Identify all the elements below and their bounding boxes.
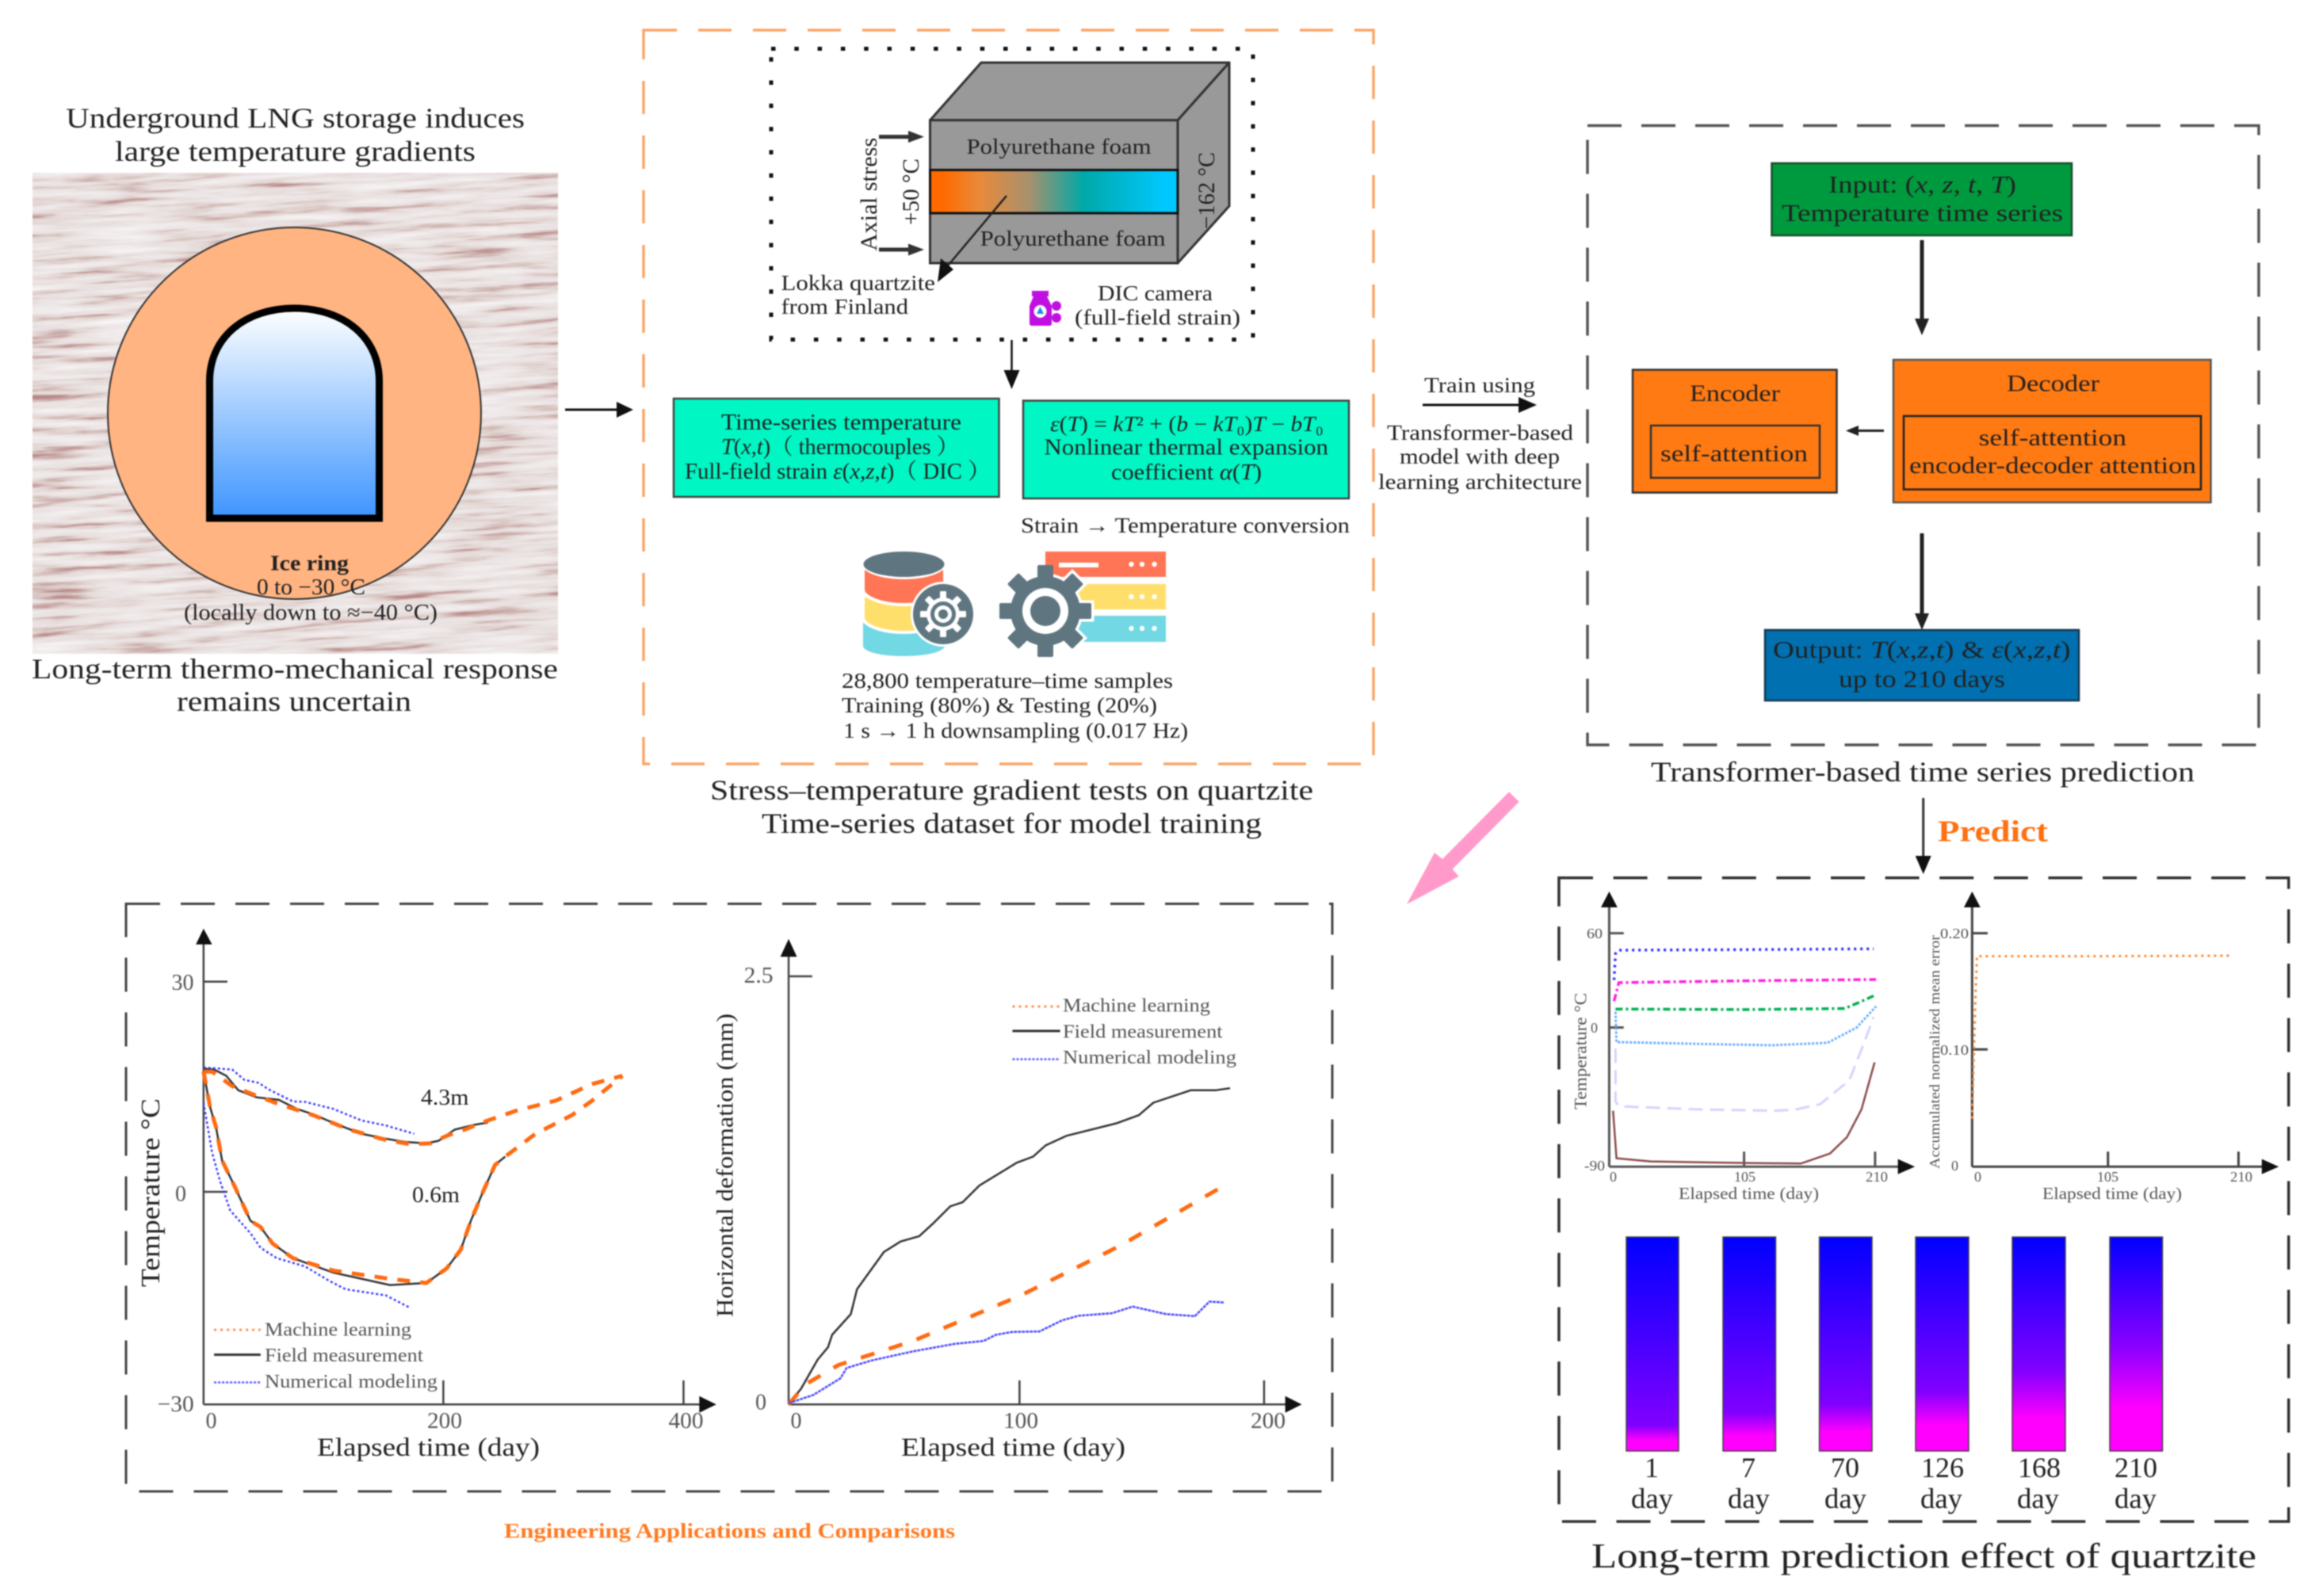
panel: long-term prediction (black dashed) <box>1559 878 2289 1522</box>
chart labels: Field measurement <box>265 1346 423 1366</box>
axes <box>1964 892 2279 1174</box>
icon: database with gear <box>862 549 976 656</box>
text: Lokka quartzite: Lokka quartzite <box>781 271 935 295</box>
axial stress and hot side labels: +50 °C <box>898 158 924 225</box>
panel: transformer model (gray dashed) <box>1587 125 2259 745</box>
chart labels: 0 <box>791 1409 802 1434</box>
gradient bars: 168 day: 168 <box>2018 1452 2061 1483</box>
chart labels: Elapsed time (day) <box>901 1434 1125 1462</box>
label: predict: Predict <box>1938 815 2048 849</box>
chart labels: 210 <box>1866 1169 1888 1185</box>
chart labels: Elapsed time (day) <box>2042 1184 2182 1203</box>
rock texture background <box>32 173 559 655</box>
box: time-series temperature data: Full-field strain ε(x,z,t)（ DIC ） <box>685 459 991 484</box>
heading: underground LNG storage: Underground LNG storage induces <box>66 102 525 134</box>
gradient bars: 7 day: 7 <box>1741 1452 1755 1483</box>
panel: stress-temperature tests (orange dashed) <box>644 30 1373 764</box>
axes <box>196 929 716 1413</box>
chart labels: Machine learning <box>265 1319 411 1340</box>
box: encoder <box>1633 370 1837 493</box>
dotted test setup frame <box>771 49 1253 339</box>
chart labels <box>1927 926 2252 1203</box>
series: field measurement <box>789 1088 1230 1404</box>
box: decoder: Decoder <box>2007 371 2099 396</box>
chart labels: 200 <box>1251 1409 1286 1434</box>
series: error curve <box>1972 956 2230 1119</box>
ice ring circle <box>108 227 481 599</box>
chart labels: Field measurement <box>1063 1021 1223 1042</box>
arrow: decoder to encoder <box>1846 426 1884 436</box>
text: long-term response uncertain: remains uncertain <box>177 685 411 717</box>
arrow: decoder to output <box>1915 533 1929 630</box>
text: dataset description: 28,800 temperature–time samples <box>842 669 1173 693</box>
gradient bars: 70 day: day <box>1824 1483 1866 1514</box>
series: numerical modeling <box>204 1067 415 1308</box>
arrow: train using transformer: Transformer-based <box>1387 421 1574 445</box>
chart: accumulated normalized mean error <box>1927 892 2279 1203</box>
chart: horizontal deformation comparison <box>712 939 1302 1462</box>
series: numerical modeling <box>789 1302 1224 1403</box>
legend lines <box>1012 1006 1060 1060</box>
caption: stress-temperature tests <box>710 774 1313 839</box>
gradient bars: 7 day: day <box>1728 1483 1770 1514</box>
box: output <box>1765 630 2079 701</box>
chart labels <box>1571 926 1888 1203</box>
chart labels: 200 <box>427 1409 462 1434</box>
series: machine learning <box>204 1071 622 1283</box>
chart labels: 105 <box>1734 1169 1755 1185</box>
ice ring label: (locally down to ≈−40 °C) <box>184 601 437 625</box>
chart labels: 400 <box>669 1409 704 1434</box>
chart: predicted temperature <box>1571 892 1915 1203</box>
chart labels: 105 <box>2097 1169 2118 1185</box>
heading: underground LNG storage: large temperature gradients <box>115 136 476 167</box>
text: long-term response uncertain <box>32 653 558 717</box>
box: thermal expansion equation: Nonlinear thermal expansion <box>1045 436 1328 460</box>
series: temperature curves <box>1613 949 1876 1163</box>
chart labels: Horizontal deformation (mm) <box>712 1014 739 1317</box>
gradient bars: 70 day: 70 <box>1831 1452 1859 1483</box>
box: thermal expansion equation <box>1023 401 1349 498</box>
chart labels: 60 <box>1587 926 1603 941</box>
chart labels: 0 <box>1610 1169 1617 1185</box>
text: DIC camera: (full-field strain) <box>1075 306 1240 330</box>
gradient bars: 210 day <box>2110 1237 2162 1514</box>
arrow: setup to data boxes <box>1003 340 1019 389</box>
text: Lokka quartzite: from Finland <box>781 295 909 319</box>
caption: engineering applications: Engineering Applications and Comparisons <box>504 1520 955 1543</box>
chart labels: Numerical modeling <box>1063 1048 1236 1068</box>
specimen block: Polyurethane foam <box>980 227 1166 250</box>
chart labels: Elapsed time (day) <box>317 1434 540 1462</box>
icon: DIC camera <box>1030 291 1061 326</box>
axial stress and hot side labels: Axial stress <box>856 138 882 251</box>
chart labels: 0 <box>206 1409 217 1434</box>
box: decoder: self-attention <box>1979 425 2126 451</box>
arrow: train using transformer: Train using <box>1424 373 1535 397</box>
text: strain to temperature conversion: Strain → Temperature conversion <box>1021 514 1351 537</box>
panel: engineering applications (dashed) <box>126 903 1332 1491</box>
text: DIC camera: DIC camera <box>1098 281 1213 305</box>
chart labels <box>136 971 704 1462</box>
chart labels: 30 <box>171 971 193 995</box>
axial stress and hot side labels <box>856 131 924 255</box>
arrow: rock to tests <box>565 402 633 418</box>
chart labels: Numerical modeling <box>265 1372 437 1392</box>
chart labels: Elapsed time (day) <box>1679 1184 1819 1203</box>
box: input: Temperature time series <box>1782 199 2063 227</box>
box: output: up to 210 days <box>1839 665 2005 693</box>
arrow: train using transformer: model with deep <box>1400 445 1560 468</box>
caption: stress-temperature tests: Stress–temperature gradient tests on quartzite <box>710 774 1313 806</box>
box: thermal expansion equation: ε(T) = kT² + (b − kT₀)T − bT₀ <box>1050 412 1324 436</box>
text: dataset description <box>842 669 1188 743</box>
text: DIC camera <box>1075 281 1240 330</box>
chart labels: −30 <box>158 1392 194 1417</box>
arrow: predict <box>1916 798 1931 874</box>
arrow: to quartzite label <box>938 196 1007 282</box>
chart: temperature comparison <box>136 929 716 1462</box>
series: machine learning <box>789 1188 1221 1404</box>
icon: server stack with gear <box>999 552 1166 657</box>
series: field measurement <box>204 1069 505 1285</box>
chart labels: Machine learning <box>1063 995 1210 1016</box>
box: decoder: encoder-decoder attention <box>1909 452 2196 479</box>
arrow: train using transformer: learning architecture <box>1378 470 1582 494</box>
chart labels: 0 <box>755 1390 766 1415</box>
chart labels: 0 <box>1951 1158 1958 1174</box>
box: time-series temperature data: Time-series temperature <box>721 410 961 435</box>
LNG tunnel <box>209 308 379 518</box>
chart labels: 100 <box>1003 1409 1038 1434</box>
box: time-series temperature data: T(x,t)（ thermocouples ） <box>721 434 959 460</box>
heading: underground LNG storage <box>66 102 525 167</box>
caption: stress-temperature tests: Time-series dataset for model training <box>762 808 1262 839</box>
specimen block: Polyurethane foam <box>967 135 1151 158</box>
gradient bars: 126 day: 126 <box>1921 1452 1964 1483</box>
box: decoder <box>1893 360 2211 502</box>
gradient bars: 1 day: 1 <box>1645 1452 1659 1483</box>
caption: transformer-based prediction: Transformer-based time series prediction <box>1651 756 2195 788</box>
legend lines <box>214 1330 261 1383</box>
arrow: train using transformer <box>1378 373 1582 494</box>
gradient bars: 126 day: day <box>1920 1483 1962 1514</box>
gradient bars: 126 day <box>1916 1237 1969 1514</box>
box: input <box>1772 163 2072 235</box>
gradient bars: 1 day: day <box>1631 1483 1673 1514</box>
text: dataset description: Training (80%) & Testing (20%) <box>842 693 1157 717</box>
chart labels: 0.20 <box>1940 926 1969 941</box>
ice ring label: 0 to −30 °C <box>257 575 365 600</box>
box: encoder: Encoder <box>1690 380 1780 407</box>
text: dataset description: 1 s → 1 h downsampling (0.017 Hz) <box>843 719 1188 743</box>
chart labels: 210 <box>2230 1169 2252 1185</box>
box: input: Input: ( x, z, t, T) <box>1828 170 2016 198</box>
caption: long-term prediction effect: Long-term prediction effect of quartzite <box>1591 1537 2256 1575</box>
box: encoder: self-attention <box>1660 441 1808 467</box>
chart labels: 4.3m <box>421 1086 469 1110</box>
ice ring label <box>184 552 437 625</box>
chart labels: 0 <box>175 1182 186 1206</box>
arrow: pink to engineering applications <box>1407 792 1519 904</box>
axes <box>781 939 1302 1413</box>
chart labels: 0.10 <box>1940 1042 1969 1058</box>
gradient bars: 1 day <box>1626 1237 1679 1514</box>
chart labels: -90 <box>1584 1158 1605 1174</box>
box: thermal expansion equation: coefficient α(T) <box>1111 460 1262 485</box>
chart labels <box>712 964 1286 1462</box>
chart labels: Temperature °C <box>1571 993 1591 1109</box>
gradient bars: 7 day <box>1723 1237 1775 1514</box>
chart labels: Accumulated normalized mean error <box>1927 935 1943 1169</box>
gradient bars: 168 day: day <box>2017 1483 2059 1514</box>
specimen block: −162 °C <box>1194 152 1220 229</box>
gradient bars: 70 day <box>1820 1237 1872 1514</box>
chart labels: 0.6m <box>412 1183 460 1208</box>
gradient bars: 210 day: day <box>2115 1483 2157 1514</box>
axes <box>1601 892 1915 1174</box>
chart labels: 0 <box>1974 1169 1981 1185</box>
gradient bars: 210 day: 210 <box>2115 1452 2157 1483</box>
chart labels: 2.5 <box>744 964 774 988</box>
gradient bars: 168 day <box>2012 1237 2065 1514</box>
arrow: input to decoder <box>1915 240 1929 335</box>
text: Lokka quartzite <box>781 271 935 319</box>
box: output: Output: T(x,z,t) & ε(x,z,t) <box>1773 636 2071 663</box>
specimen block <box>930 63 1229 263</box>
box: time-series temperature data <box>674 399 999 497</box>
ice ring label: Ice ring <box>270 552 350 575</box>
panel: rock cross-section with ice ring and tunnel <box>32 173 559 655</box>
chart labels: 0 <box>1591 1020 1598 1036</box>
chart labels: Temperature °C <box>136 1098 166 1287</box>
text: long-term response uncertain: Long-term thermo-mechanical response <box>32 653 558 685</box>
